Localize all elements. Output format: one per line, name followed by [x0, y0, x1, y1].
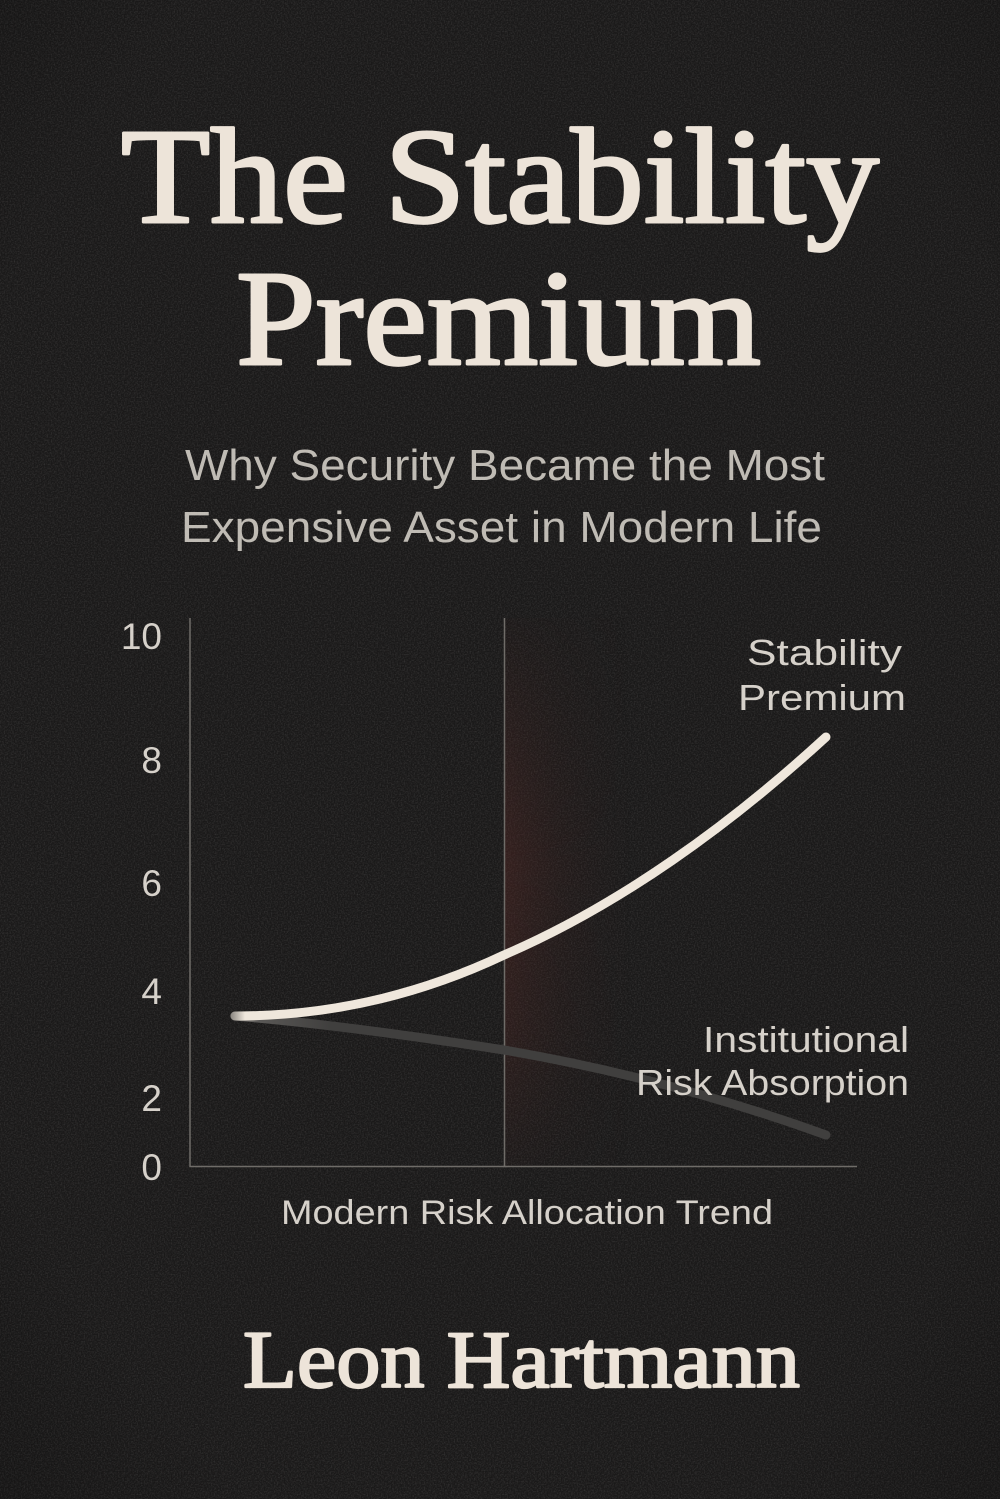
- title: Premium: [236, 244, 761, 394]
- subtitle: [181, 441, 825, 552]
- y axis labels: 10: [121, 616, 162, 657]
- red highlight band: [505, 680, 568, 1120]
- institutional risk absorption label: Risk Absorption: [636, 1062, 909, 1103]
- axes and divider: [190, 618, 857, 1166]
- y axis labels: 4: [141, 971, 162, 1012]
- institutional risk absorption label: [636, 1019, 909, 1103]
- author: Leon Hartmann: [243, 1314, 800, 1405]
- x axis label: Modern Risk Allocation Trend: [281, 1194, 773, 1232]
- line chart: [121, 616, 909, 1232]
- y axis labels: 8: [141, 740, 162, 781]
- y axis labels: [121, 616, 162, 1188]
- stability premium line: [235, 737, 826, 1016]
- institutional risk absorption label: Institutional: [703, 1019, 909, 1060]
- subtitle: Why Security Became the Most: [185, 441, 825, 490]
- y axis labels: 2: [141, 1078, 162, 1119]
- y axis labels: 6: [141, 863, 162, 904]
- stability premium label: Stability: [747, 632, 902, 673]
- stability premium label: Premium: [738, 677, 906, 718]
- title: [121, 102, 879, 394]
- y axis labels: 0: [141, 1147, 162, 1188]
- subtitle: Expensive Asset in Modern Life: [181, 503, 822, 552]
- title: The Stability: [121, 102, 879, 252]
- institutional risk absorption line: [235, 1016, 826, 1135]
- stability premium label: [738, 632, 906, 718]
